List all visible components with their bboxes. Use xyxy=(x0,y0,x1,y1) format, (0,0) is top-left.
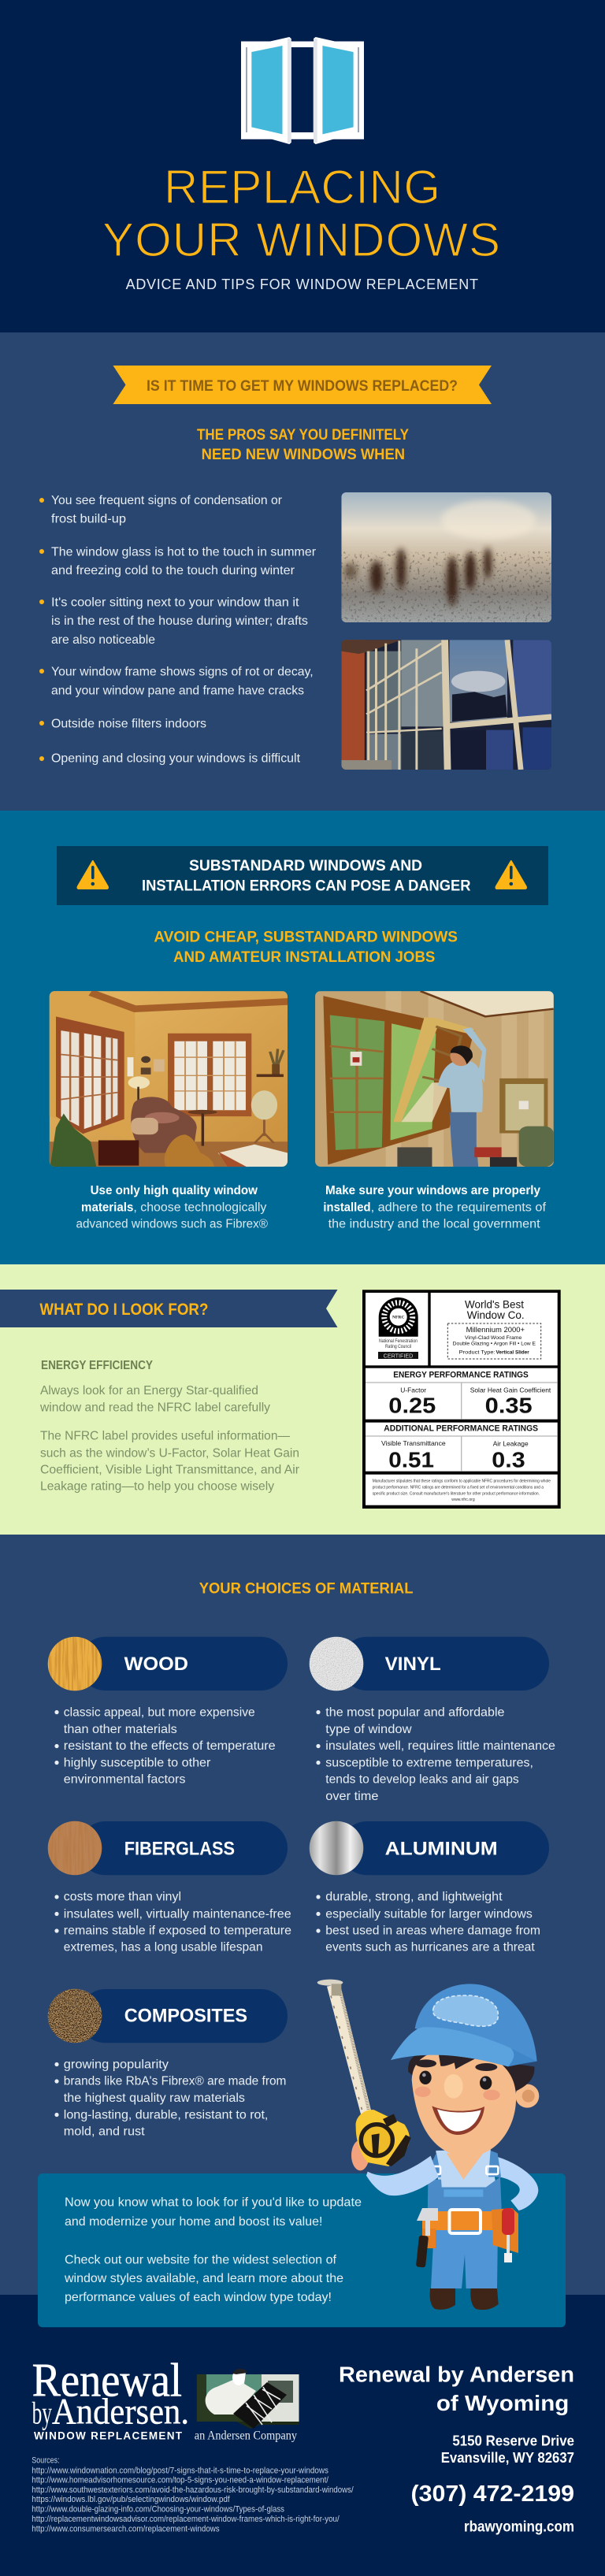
ribbon banner: IS IT TIME TO GET MY WINDOWS REPLACED? xyxy=(147,378,458,395)
card: fiberglass: remains stable if exposed to temperature xyxy=(64,1925,291,1938)
photo: installer fitting window xyxy=(315,991,554,1167)
NFRC label: Solar Heat Gain Coefficient xyxy=(470,1386,551,1394)
NFRC label: product performance. NFRC ratings are determined for a fixed set of environmental conditions and a xyxy=(373,1485,544,1490)
NFRC label: 0.25 xyxy=(388,1393,436,1417)
text: energy efficiency: ENERGY EFFICIENCY xyxy=(41,1359,154,1372)
tool belt xyxy=(416,2208,518,2268)
heading: the pros say xyxy=(197,427,409,463)
card: composites: the highest quality raw materials xyxy=(64,2092,245,2105)
ribbon banner xyxy=(113,366,492,404)
NFRC label: Millennium 2000+ xyxy=(466,1326,525,1334)
logo: Renewal by Andersen: Renewal xyxy=(32,2355,182,2407)
NFRC label: Vinyl-Clad Wood Frame xyxy=(465,1335,522,1341)
card: aluminum xyxy=(309,1821,549,1954)
card: wood: classic appeal, but more expensive xyxy=(64,1706,255,1719)
caption: quality materials: Use only high quality window xyxy=(91,1184,258,1197)
legs and boots xyxy=(430,2228,499,2310)
callout: closing message: and modernize your home and boost its value! xyxy=(65,2215,322,2229)
heading: avoid cheap: AVOID CHEAP, SUBSTANDARD WINDOWS xyxy=(154,930,458,946)
warning banner: INSTALLATION ERRORS CAN POSE A DANGER xyxy=(142,878,471,895)
NFRC label: Visible Transmittance xyxy=(381,1439,446,1447)
photo: living room xyxy=(50,991,288,1167)
card: composites xyxy=(47,1988,288,2139)
card: vinyl: insulates well, requires little maintenance xyxy=(325,1739,555,1753)
photo: worn window frame xyxy=(341,640,551,770)
card: vinyl: type of window xyxy=(325,1723,412,1736)
right arm xyxy=(494,2156,538,2210)
bullet list: signs: Opening and closing your windows is difficult xyxy=(51,752,301,766)
card: composites: mold, and rust xyxy=(64,2125,145,2139)
section: what do i look for xyxy=(0,1264,605,1535)
smile xyxy=(432,2106,484,2135)
illustration: handyman with tape measure xyxy=(317,1980,539,2310)
logo: Renewal by Andersen: Andersen. xyxy=(52,2392,189,2433)
heading: the pros say: NEED NEW WINDOWS WHEN xyxy=(202,447,405,463)
section: danger xyxy=(0,811,605,1264)
photo: condensation on glass xyxy=(341,492,551,622)
NFRC label: www.nfrc.org xyxy=(451,1498,475,1502)
sources: http://www.homeadvisorhomesource.com/top-5-signs-you-need-a-window-replacement/ xyxy=(32,2475,329,2485)
bullet list: signs: are also noticeable xyxy=(51,633,155,647)
logo: Renewal by Andersen: by xyxy=(32,2396,52,2431)
sources: https://windows.lbl.gov/pub/selectingwindows/window.pdf xyxy=(32,2495,231,2504)
bullet list: signs: frost build-up xyxy=(51,513,126,526)
icon: warning right xyxy=(496,861,526,889)
card: vinyl: the most popular and affordable xyxy=(325,1706,504,1719)
NFRC label: 0.35 xyxy=(485,1393,533,1417)
card: composites: brands like RbA's Fibrex® are made from xyxy=(64,2075,286,2088)
callout: closing message: Check out our website for the widest selection of xyxy=(65,2253,337,2266)
bullet list: signs xyxy=(39,494,317,766)
NFRC label: Vertical Slider xyxy=(496,1349,529,1355)
contact block: Evansville, WY 82637 xyxy=(441,2449,574,2466)
card: aluminum: events such as hurricanes are a threat xyxy=(325,1941,535,1954)
NFRC label: World's Best xyxy=(465,1298,524,1311)
NFRC label: Product Type: xyxy=(459,1349,496,1355)
card: wood: than other materials xyxy=(64,1723,177,1736)
card: aluminum: durable, strong, and lightweight xyxy=(325,1891,503,1904)
contact block xyxy=(339,2362,574,2535)
warning banner: SUBSTANDARD WINDOWS AND xyxy=(189,858,422,874)
caption: quality materials: , choose technologically xyxy=(133,1201,267,1215)
card: wood: resistant to the effects of temperature xyxy=(64,1739,276,1753)
caption: proper installation: Make sure your windows are properly xyxy=(325,1184,540,1197)
bullet list: signs: is in the rest of the house during winter; drafts xyxy=(51,614,308,628)
sources: http://www.consumersearch.com/replacement-windows xyxy=(32,2524,220,2533)
callout: closing message: performance values of each window type today! xyxy=(65,2291,332,2304)
callout: closing message xyxy=(38,2173,566,2327)
NFRC label: 0.3 xyxy=(492,1448,525,1472)
NFRC logo: Rating Council xyxy=(385,1345,411,1349)
caption: proper installation: installed xyxy=(323,1201,371,1215)
text: energy efficiency xyxy=(39,1359,300,1494)
ribbon: what do i look for: WHAT DO I LOOK FOR? xyxy=(39,1300,208,1319)
card: wood: WOOD xyxy=(124,1654,188,1675)
contact block: (307) 472-2199 xyxy=(411,2481,574,2507)
heading: the pros say: THE PROS SAY YOU DEFINITELY xyxy=(197,427,409,444)
NFRC logo: NFRC xyxy=(392,1316,405,1320)
sources: http://www.windownation.com/blog/post/7-signs-that-it-s-time-to-replace-your-windows xyxy=(32,2466,328,2475)
NFRC logo: CERTIFIED xyxy=(384,1353,413,1359)
NFRC label: ADDITIONAL PERFORMANCE RATINGS xyxy=(384,1424,538,1434)
NFRC label xyxy=(362,1290,561,1509)
face xyxy=(412,2051,516,2156)
icon: warning left xyxy=(77,861,108,889)
NFRC logo: National Fenestration xyxy=(379,1339,418,1344)
warning banner xyxy=(57,846,548,905)
logo illustration: man carrying window xyxy=(197,2369,299,2429)
card: composites: long-lasting, durable, resistant to rot, xyxy=(64,2108,268,2121)
section: is it time xyxy=(0,332,605,811)
hair back xyxy=(408,2053,534,2093)
card: vinyl: susceptible to extreme temperatures, xyxy=(325,1756,533,1769)
cheeks and nose xyxy=(415,2087,431,2097)
bullet list: signs: It's cooler sitting next to your window than it xyxy=(51,596,299,609)
tape blade xyxy=(327,1984,372,2115)
card: fiberglass: extremes, has a long usable lifespan xyxy=(64,1941,263,1954)
shirt collar xyxy=(436,2149,496,2188)
callout: closing message: Now you know what to look for if you'd like to update xyxy=(65,2196,362,2210)
logo: Renewal by Andersen xyxy=(32,2355,299,2443)
sources: http://www.double-glazing-info.com/Choosing-your-windows/Types-of-glass xyxy=(32,2504,284,2514)
caption: quality materials: materials xyxy=(81,1201,133,1215)
ribbon: what do i look for xyxy=(0,1290,337,1327)
caption: proper installation: the industry and the local government xyxy=(328,1218,540,1231)
NFRC label: Window Co. xyxy=(467,1308,525,1321)
card: vinyl: VINYL xyxy=(385,1654,441,1675)
logo: Renewal by Andersen: WINDOW REPLACEMENT xyxy=(34,2430,183,2442)
NFRC label: ENERGY PERFORMANCE RATINGS xyxy=(393,1370,529,1379)
contact block: of Wyoming xyxy=(436,2391,569,2415)
NFRC label: Double Glazing • Argon Fill • Low E xyxy=(453,1342,536,1347)
bullet list: signs: Your window frame shows signs of rot or decay, xyxy=(51,666,314,679)
icon: open window xyxy=(241,37,364,144)
bullet list: signs: and your window pane and frame have cracks xyxy=(51,684,304,697)
card: vinyl xyxy=(309,1636,555,1803)
caption: proper installation: , adhere to the requirements of xyxy=(371,1201,547,1215)
section: footer xyxy=(0,2295,605,2576)
eyes xyxy=(419,2071,432,2084)
section: materials xyxy=(0,1535,605,2295)
caption: quality materials: advanced windows such as Fibrex® xyxy=(76,1218,269,1231)
text: energy efficiency: window and read the NFRC label carefully xyxy=(39,1401,270,1415)
card: wood: highly susceptible to other xyxy=(64,1756,210,1769)
NFRC label: 0.51 xyxy=(388,1448,434,1472)
bullet list: signs: You see frequent signs of condensation or xyxy=(51,494,283,507)
heading: avoid cheap xyxy=(154,930,458,966)
callout: closing message: window styles available, and learn more about the xyxy=(64,2272,343,2285)
text: energy efficiency: Coefficient, Visible Light Transmittance, and Air xyxy=(40,1463,300,1476)
text: energy efficiency: Leakage rating—to help you choose wisely xyxy=(40,1480,274,1494)
NFRC label: Air Leakage xyxy=(493,1440,529,1448)
left arm xyxy=(366,2156,439,2196)
card: aluminum: best used in areas where damage from xyxy=(325,1925,540,1938)
subtitle: ADVICE AND TIPS FOR WINDOW REPLACEMENT xyxy=(126,277,478,292)
text: energy efficiency: The NFRC label provides useful information— xyxy=(40,1429,290,1442)
caption: proper installation xyxy=(323,1184,547,1231)
heading: your choices of material: YOUR CHOICES OF MATERIAL xyxy=(199,1580,414,1597)
NFRC logo xyxy=(378,1297,418,1359)
card: aluminum: ALUMINUM xyxy=(385,1838,498,1859)
card: wood xyxy=(47,1636,288,1787)
card: fiberglass: insulates well, virtually maintenance-free xyxy=(64,1907,291,1921)
card: vinyl: tends to develop leaks and air gaps xyxy=(325,1773,519,1787)
bangs and brows xyxy=(439,2054,475,2069)
NFRC label: Manufacturer stipulates that these ratings conform to applicable NFRC procedures for determining whole xyxy=(373,1479,551,1484)
title xyxy=(102,161,500,266)
text: energy efficiency: Always look for an Energy Star-qualified xyxy=(40,1384,258,1397)
card: composites: growing popularity xyxy=(64,2058,169,2071)
title: REPLACING xyxy=(164,161,440,213)
card: wood: environmental factors xyxy=(64,1773,186,1787)
logo: Renewal by Andersen: an Andersen Company xyxy=(195,2429,297,2443)
contact block: 5150 Reserve Drive xyxy=(452,2432,574,2448)
tape body xyxy=(356,2110,410,2166)
card: composites: COMPOSITES xyxy=(124,2006,247,2027)
text: energy efficiency: such as the window’s U-Factor, Solar Heat Gain xyxy=(40,1446,299,1460)
sources: http://www.southwestexteriors.com/avoid-the-hazardous-risk-brought-by-substandard-windows/ xyxy=(32,2485,354,2495)
contact block: Renewal by Andersen xyxy=(339,2362,574,2386)
sources xyxy=(32,2456,354,2533)
NFRC label: U-Factor xyxy=(400,1386,426,1394)
NFRC label: specific product size. Consult manufacturer's literature for other product performance information. xyxy=(373,1491,540,1496)
ear xyxy=(515,2084,539,2108)
heading: avoid cheap: AND AMATEUR INSTALLATION JOBS xyxy=(173,949,435,966)
card: fiberglass: costs more than vinyl xyxy=(64,1891,181,1904)
bullet list: signs: The window glass is hot to the touch in summer xyxy=(51,545,317,559)
card: fiberglass xyxy=(47,1821,291,1954)
title: YOUR WINDOWS xyxy=(102,213,500,266)
cap xyxy=(508,2040,537,2066)
contact block: rbawyoming.com xyxy=(464,2518,574,2535)
overalls bib xyxy=(428,2177,502,2222)
bullet list: signs: Outside noise filters indoors xyxy=(51,718,206,731)
card: vinyl: over time xyxy=(325,1790,378,1803)
bullet list: signs: and freezing cold to the touch during winter xyxy=(51,564,295,577)
caption: quality materials xyxy=(76,1184,269,1231)
card: aluminum: especially suitable for larger windows xyxy=(325,1907,533,1921)
section: header xyxy=(0,0,605,332)
hand xyxy=(351,2140,369,2170)
sources: Sources: xyxy=(32,2456,60,2466)
card: fiberglass: FIBERGLASS xyxy=(124,1838,235,1859)
sources: http://replacementwindowsadvisor.com/replacement-window-frames-which-is-right-for-you/ xyxy=(32,2515,340,2524)
